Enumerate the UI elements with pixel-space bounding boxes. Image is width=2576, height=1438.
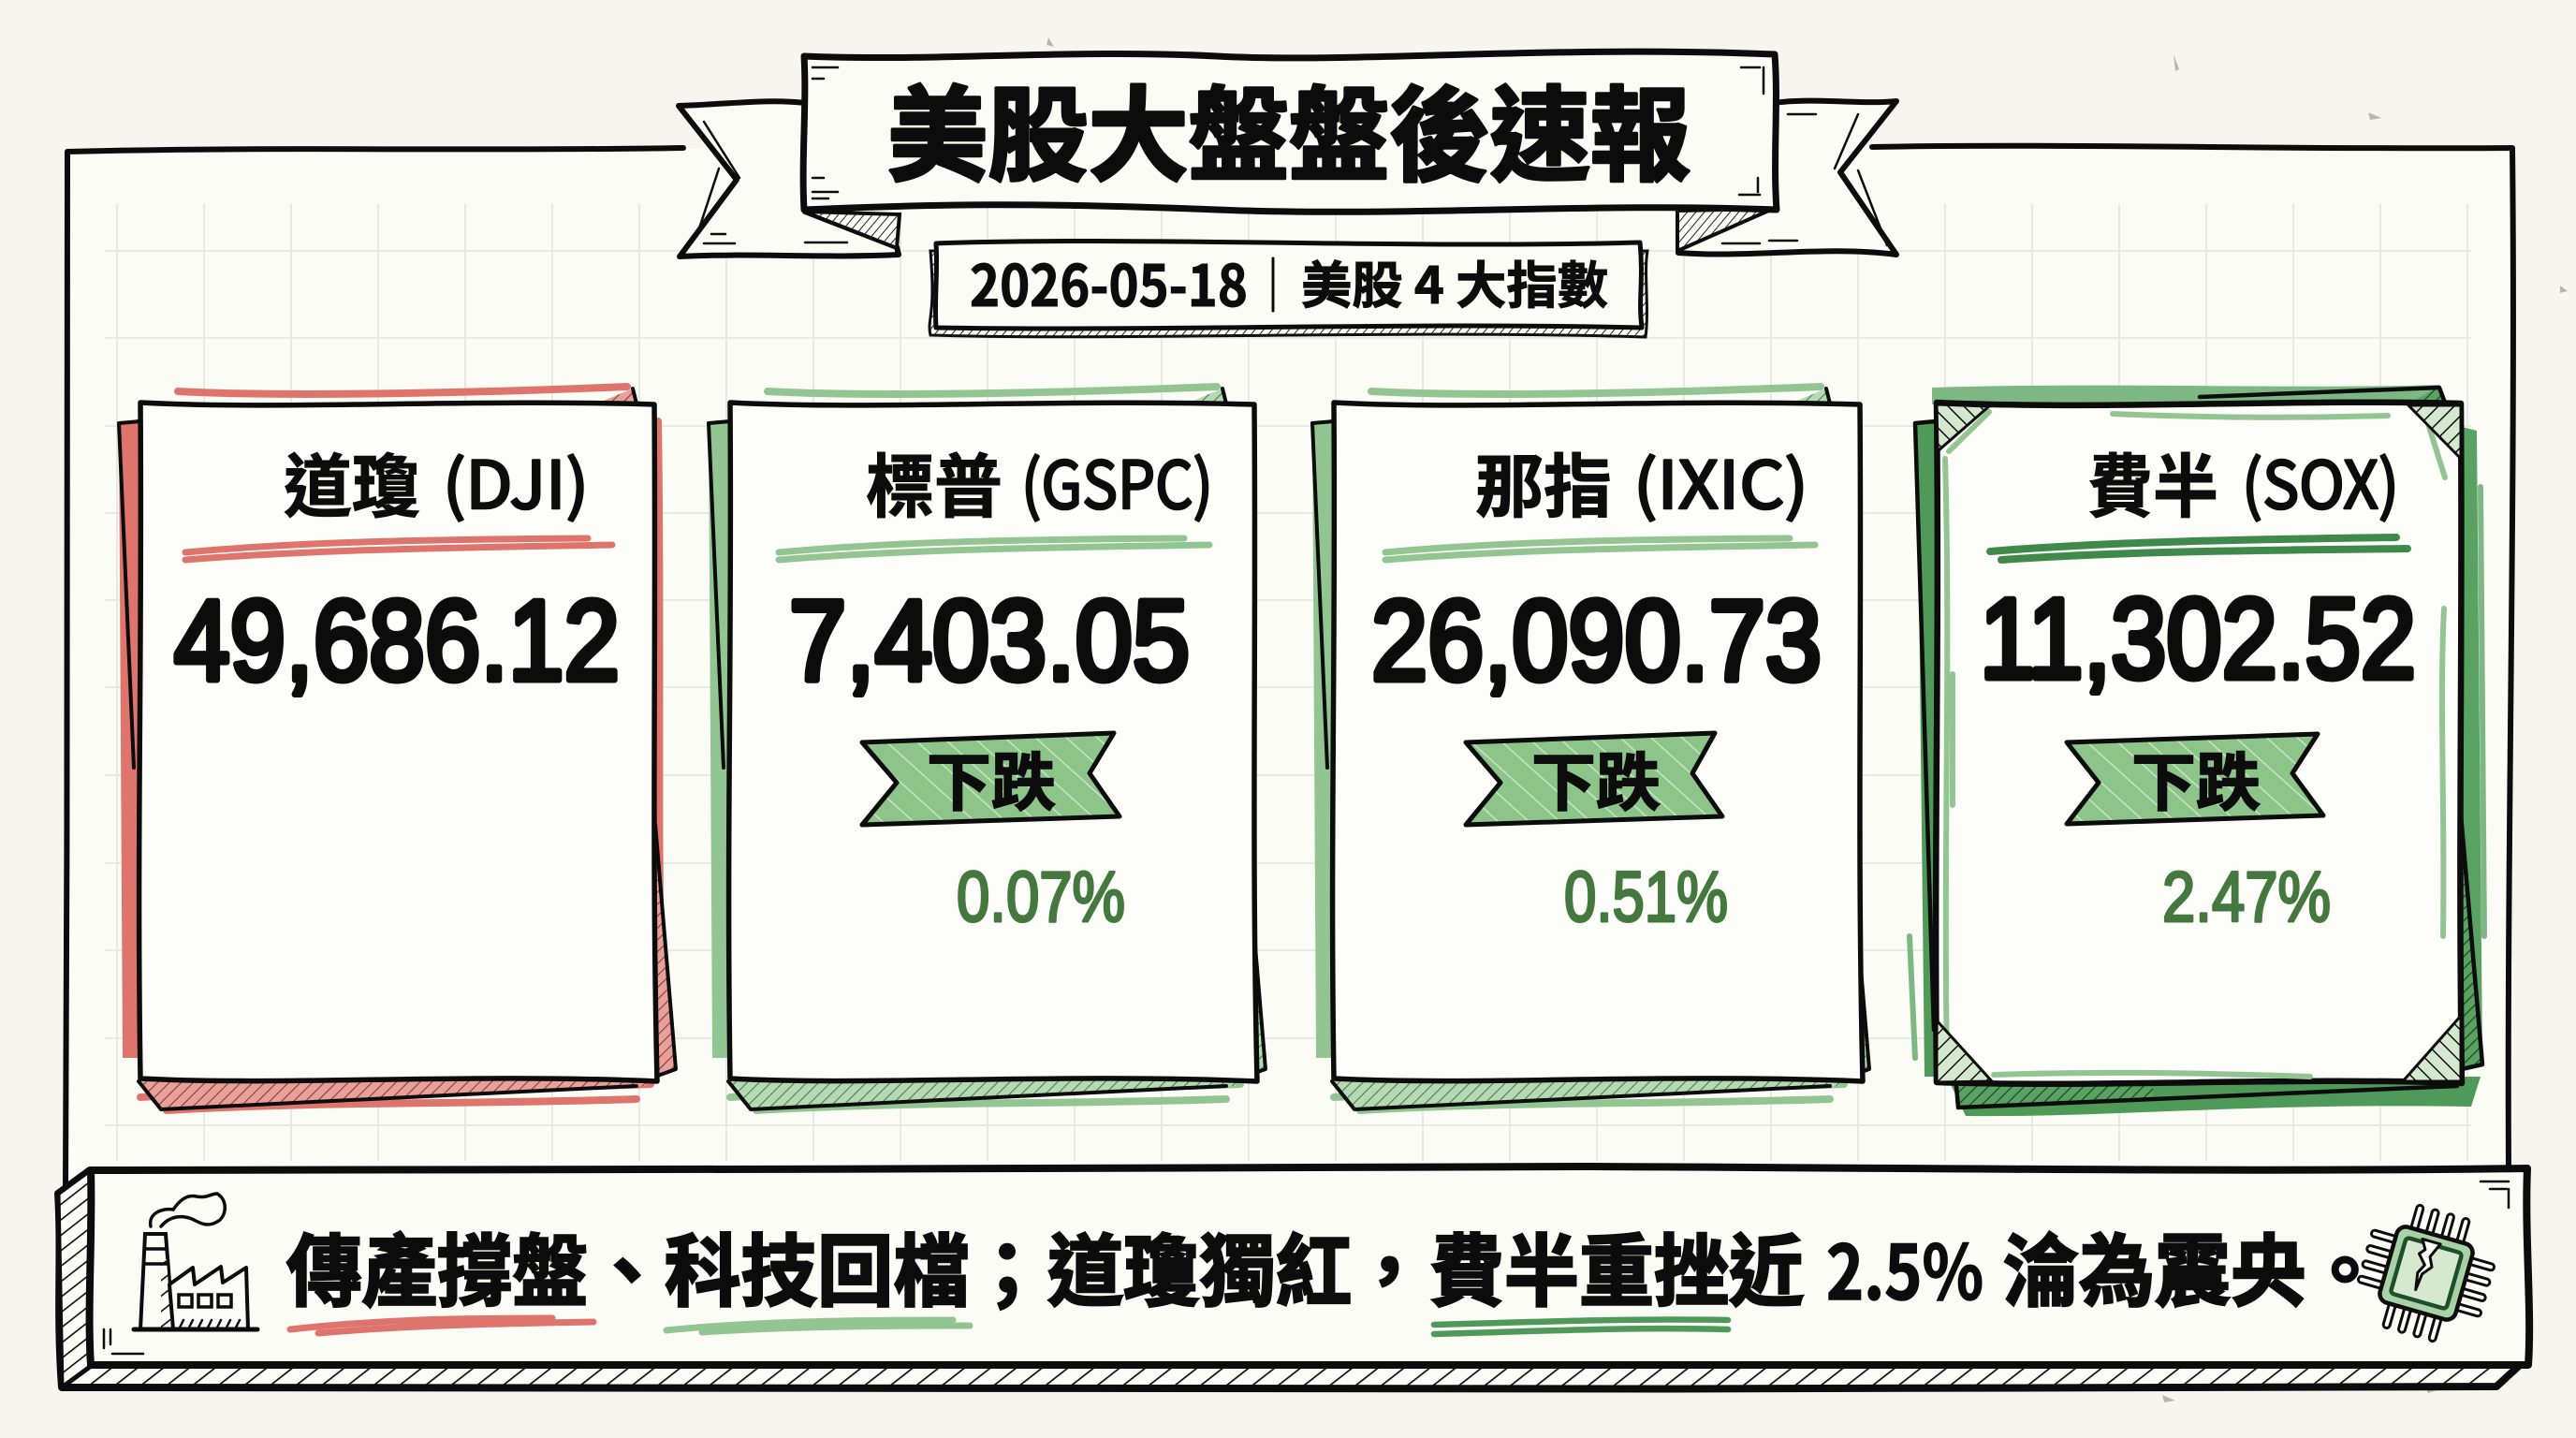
change percent: 2.47% — [2162, 858, 2331, 937]
index name: 道瓊 — [284, 432, 420, 532]
name underline — [1385, 538, 1815, 560]
ribbon corner ticks — [812, 67, 1764, 198]
card sheet — [729, 403, 1257, 1081]
index name: 標普 — [866, 432, 1003, 532]
summary sentence: ， — [1350, 1210, 1428, 1323]
card: GSPC — [709, 387, 1266, 1110]
title ribbon — [679, 51, 1896, 257]
ribbon right tail — [1677, 101, 1896, 255]
index name — [866, 432, 1213, 532]
card sheet — [1333, 403, 1863, 1081]
card sheet — [139, 403, 657, 1081]
inner highlight strokes — [1945, 412, 2445, 1077]
name underline — [1990, 537, 2408, 560]
strip front — [90, 1167, 2529, 1366]
paper specks — [1046, 37, 2568, 1402]
down badge — [1466, 731, 1722, 825]
bottom summary strip — [58, 1167, 2529, 1389]
index value: 7,403.05 — [789, 577, 1190, 704]
ribbon main band — [803, 51, 1777, 212]
light green underline — [666, 1320, 970, 1332]
index name: 那指 — [1475, 432, 1612, 532]
index name: (DJI) — [443, 433, 589, 528]
ribbon left tail — [679, 101, 900, 257]
grid lines — [105, 204, 2471, 1161]
icon: cracked chip — [2348, 1195, 2505, 1352]
down badge: 下跌 — [2131, 731, 2261, 824]
summary sentence: 費半重挫近 — [1429, 1210, 1804, 1323]
date subtitle box — [929, 240, 1647, 337]
summary sentence: 科技回檔 — [665, 1210, 970, 1323]
index name — [1475, 432, 1808, 532]
date text: 2026-05-18 — [970, 240, 1248, 323]
corner hatch triangles — [1937, 404, 2461, 1082]
down badge: 下跌 — [927, 731, 1056, 824]
change percent: 0.51% — [1564, 858, 1728, 937]
summary sentence: 2.5% — [1826, 1213, 1983, 1322]
index name: 費半 — [2087, 432, 2218, 532]
change percent: 0.07% — [957, 858, 1125, 937]
summary sentence: 、 — [588, 1210, 666, 1323]
red underline — [290, 1318, 593, 1333]
back sheet — [119, 387, 676, 1110]
index name: (IXIC) — [1633, 433, 1808, 528]
card: DJI — [119, 387, 676, 1110]
summary sentence — [286, 1210, 2384, 1323]
down badge: 下跌 — [1531, 731, 1661, 824]
main panel — [66, 146, 2513, 1191]
summary sentence: 。 — [2305, 1210, 2384, 1323]
index value: 49,686.12 — [174, 577, 620, 704]
down badge — [2067, 731, 2323, 824]
strip corner ticks — [104, 1181, 2509, 1354]
card sheet — [1936, 403, 2462, 1084]
index name: (GSPC) — [1021, 433, 1213, 528]
summary sentence: 傳產撐盤 — [286, 1210, 588, 1323]
summary sentence: 道瓊獨紅 — [1047, 1210, 1352, 1323]
strip hatched shadow — [58, 1170, 2520, 1389]
back sheet — [1312, 387, 1869, 1110]
dark green underline — [1434, 1319, 1728, 1334]
summary sentence: ； — [968, 1210, 1046, 1323]
name underline — [185, 538, 612, 560]
icon: factory — [134, 1194, 257, 1329]
summary sentence: 淪為震央 — [2003, 1210, 2306, 1323]
index value: 11,302.52 — [1980, 575, 2416, 702]
title text: 美股大盤盤後速報 — [887, 52, 1690, 202]
card: SOX — [1910, 385, 2484, 1116]
subtitle text: 美股 4 大指數 — [1301, 244, 1608, 318]
index name — [284, 432, 589, 532]
card: IXIC — [1312, 387, 1869, 1110]
index name — [2087, 432, 2399, 532]
name underline — [779, 538, 1209, 560]
down badge — [862, 731, 1120, 825]
index name: (SOX) — [2242, 433, 2399, 528]
divider — [1271, 258, 1275, 311]
back sheet — [709, 387, 1266, 1110]
back sheet — [1910, 385, 2484, 1116]
index value: 26,090.73 — [1371, 577, 1822, 704]
